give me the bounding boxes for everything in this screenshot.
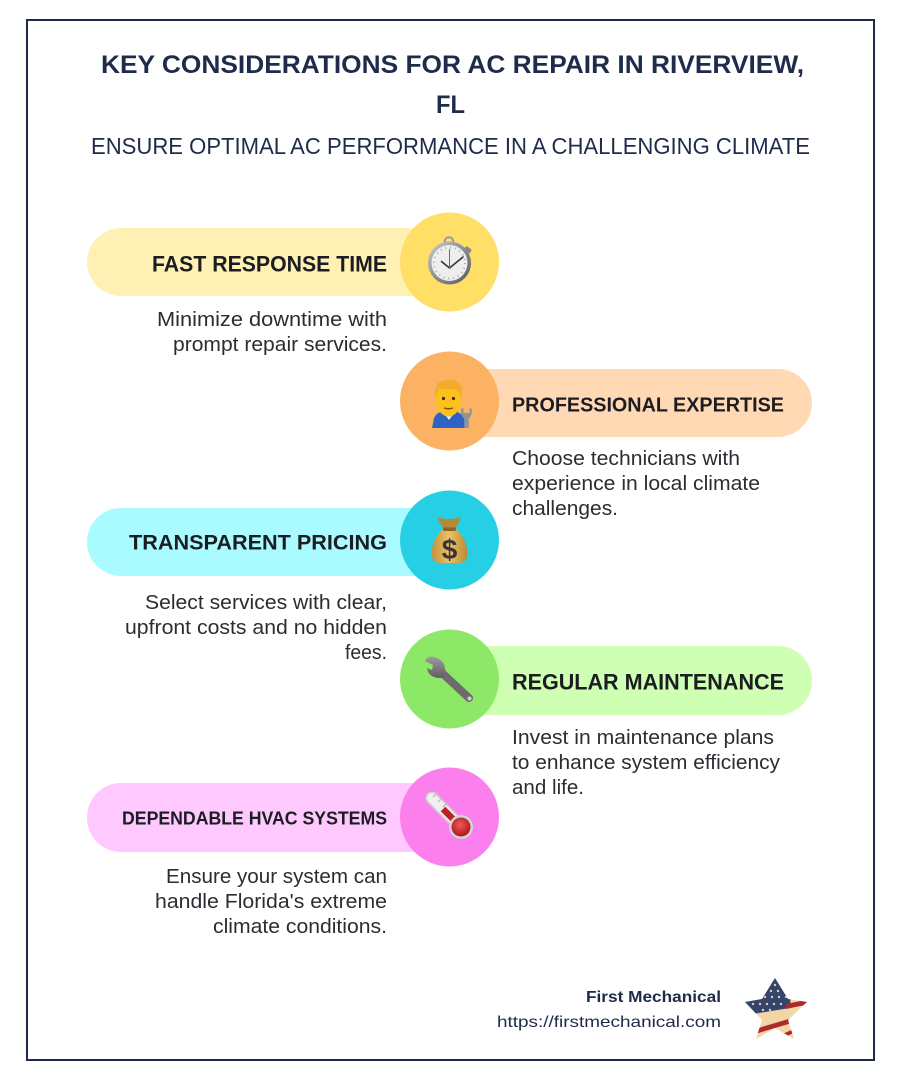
icon: stopwatch <box>428 237 472 284</box>
pill <box>432 369 812 437</box>
description: climate conditions. <box>213 916 387 938</box>
circle <box>400 352 499 450</box>
subtitle: ENSURE OPTIMAL AC PERFORMANCE IN A CHALLENGING CLIMATE <box>91 133 810 159</box>
description: Choose technicians with <box>512 448 740 470</box>
heading: TRANSPARENT PRICING <box>129 530 387 554</box>
icon: money bag: $ <box>442 534 458 565</box>
icon: wrench <box>425 657 472 700</box>
panel: dependable hvac systems <box>87 768 499 938</box>
description: prompt repair services. <box>173 334 387 356</box>
circle <box>400 630 499 728</box>
panel: transparent pricing <box>87 490 499 664</box>
description: to enhance system efficiency <box>512 752 780 774</box>
circle <box>400 768 499 866</box>
description <box>512 448 760 520</box>
description: experience in local climate <box>512 473 760 495</box>
title: FL <box>436 91 465 119</box>
pill <box>432 646 812 715</box>
pill <box>87 228 467 296</box>
heading: FAST RESPONSE TIME <box>152 252 387 276</box>
description <box>157 309 387 356</box>
description <box>125 592 387 664</box>
heading: DEPENDABLE HVAC SYSTEMS <box>122 808 387 828</box>
heading: REGULAR MAINTENANCE <box>512 670 784 694</box>
description: Invest in maintenance plans <box>512 727 774 749</box>
heading: PROFESSIONAL EXPERTISE <box>512 394 784 416</box>
pill <box>87 783 467 852</box>
panel: regular maintenance <box>400 630 812 799</box>
circle <box>400 490 499 590</box>
panel: professional expertise <box>400 352 812 520</box>
pill <box>87 508 467 576</box>
description: handle Florida's extreme <box>155 891 387 913</box>
description: fees. <box>345 642 387 664</box>
description: challenges. <box>512 498 618 520</box>
description: Ensure your system can <box>166 866 387 888</box>
icon: american flag star logo <box>745 978 807 1039</box>
description <box>512 727 780 799</box>
icon: money bag <box>432 517 467 565</box>
icon: thermometer <box>432 794 473 839</box>
footer brand text: https://firstmechanical.com <box>497 1014 721 1031</box>
footer brand text <box>497 989 721 1031</box>
title <box>101 51 804 119</box>
footer brand text: First Mechanical <box>586 989 721 1006</box>
panel: fast response time <box>87 212 499 356</box>
description: and life. <box>512 777 584 799</box>
description: Select services with clear, <box>145 592 387 614</box>
icon: mechanic <box>432 380 472 428</box>
description: Minimize downtime with <box>157 309 387 331</box>
circle <box>400 212 499 312</box>
title: KEY CONSIDERATIONS FOR AC REPAIR IN RIVERVIEW, <box>101 51 804 79</box>
description: upfront costs and no hidden <box>125 617 387 639</box>
description <box>155 866 387 938</box>
